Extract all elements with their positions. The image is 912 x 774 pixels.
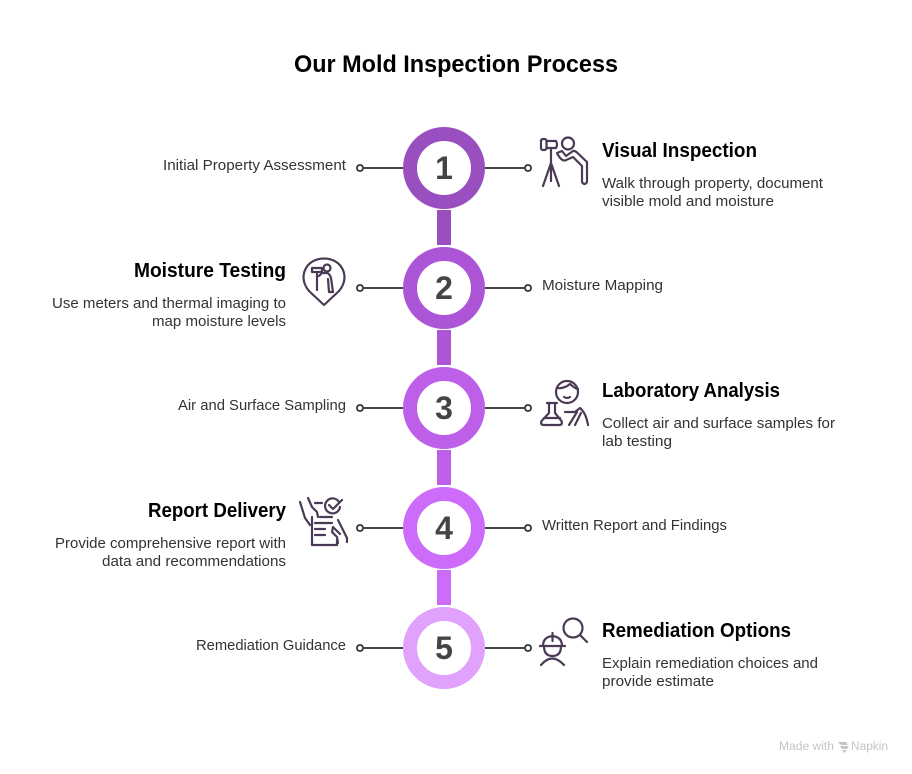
description: Visual Inspection: visible mold and moisture <box>602 194 774 210</box>
step 4 <box>55 494 727 570</box>
ring: step 3 <box>410 374 478 442</box>
number 3: 3 <box>435 390 453 426</box>
description: Laboratory Analysis: Collect air and surface samples for <box>602 416 835 432</box>
connector bar: step 3 to 4 <box>437 450 451 485</box>
icon: hands holding report with checkmark <box>300 498 347 545</box>
heading: Remediation Options: Remediation Options <box>602 620 791 642</box>
label: Initial Property Assessment: Initial Property Assessment <box>163 158 346 174</box>
number 2: 2 <box>435 270 453 306</box>
description: Moisture Testing: Use meters and thermal imaging to <box>52 296 286 312</box>
description: Remediation Options: Explain remediation choices and <box>602 656 818 672</box>
connector bar: step 2 to 3 <box>437 330 451 365</box>
description: Moisture Testing <box>52 296 286 330</box>
heading: Report Delivery: Report Delivery <box>148 500 287 522</box>
icon: person at surveying scope on tripod <box>541 138 587 186</box>
connector lines: step 3 <box>357 405 531 411</box>
icon: scientist with flask <box>541 381 588 425</box>
title: Our Mold Inspection Process <box>294 51 618 78</box>
number 5: 5 <box>435 630 453 666</box>
ring: step 2 <box>410 254 478 322</box>
description: Moisture Testing: map moisture levels <box>152 314 286 330</box>
heading: Visual Inspection: Visual Inspection <box>602 140 757 162</box>
description: Remediation Options <box>602 656 818 690</box>
step 3 <box>178 374 835 450</box>
heading: Moisture Testing: Moisture Testing <box>134 260 286 282</box>
label: Moisture Mapping: Moisture Mapping <box>542 278 663 294</box>
label: Written Report and Findings: Written Report and Findings <box>542 518 727 534</box>
connector lines: step 1 <box>357 165 531 171</box>
step 2 <box>52 254 663 330</box>
ring: step 5 <box>410 614 478 682</box>
number 1: 1 <box>435 150 453 186</box>
description: Laboratory Analysis: lab testing <box>602 434 672 450</box>
connector lines: step 4 <box>357 525 531 531</box>
number 4: 4 <box>435 510 453 546</box>
step 5 <box>196 614 818 690</box>
step 1 <box>163 134 823 210</box>
heading: Laboratory Analysis: Laboratory Analysis <box>602 380 780 402</box>
connector lines: step 2 <box>357 285 531 291</box>
description: Report Delivery: data and recommendations <box>102 554 286 570</box>
icon: location pin with inspector <box>304 258 344 305</box>
label: Remediation Guidance: Remediation Guidance <box>196 638 346 654</box>
description: Visual Inspection <box>602 176 823 210</box>
description: Laboratory Analysis <box>602 416 835 450</box>
description: Report Delivery <box>55 536 286 570</box>
label: Air and Surface Sampling: Air and Surface Sampling <box>178 398 346 414</box>
description: Remediation Options: provide estimate <box>602 674 714 690</box>
ring: step 1 <box>410 134 478 202</box>
connector bar: step 1 to 2 <box>437 210 451 245</box>
watermark: Made with Napkin <box>779 741 888 753</box>
connector lines: step 5 <box>357 645 531 651</box>
description: Report Delivery: Provide comprehensive report with <box>55 536 286 552</box>
connector bar: step 4 to 5 <box>437 570 451 605</box>
watermark: Made with Napkin: Made with <box>779 741 834 753</box>
icon: worker with magnifying glass <box>540 618 587 665</box>
watermark: Made with Napkin: Napkin <box>851 741 888 753</box>
ring: step 4 <box>410 494 478 562</box>
description: Visual Inspection: Walk through property, document <box>602 176 823 192</box>
